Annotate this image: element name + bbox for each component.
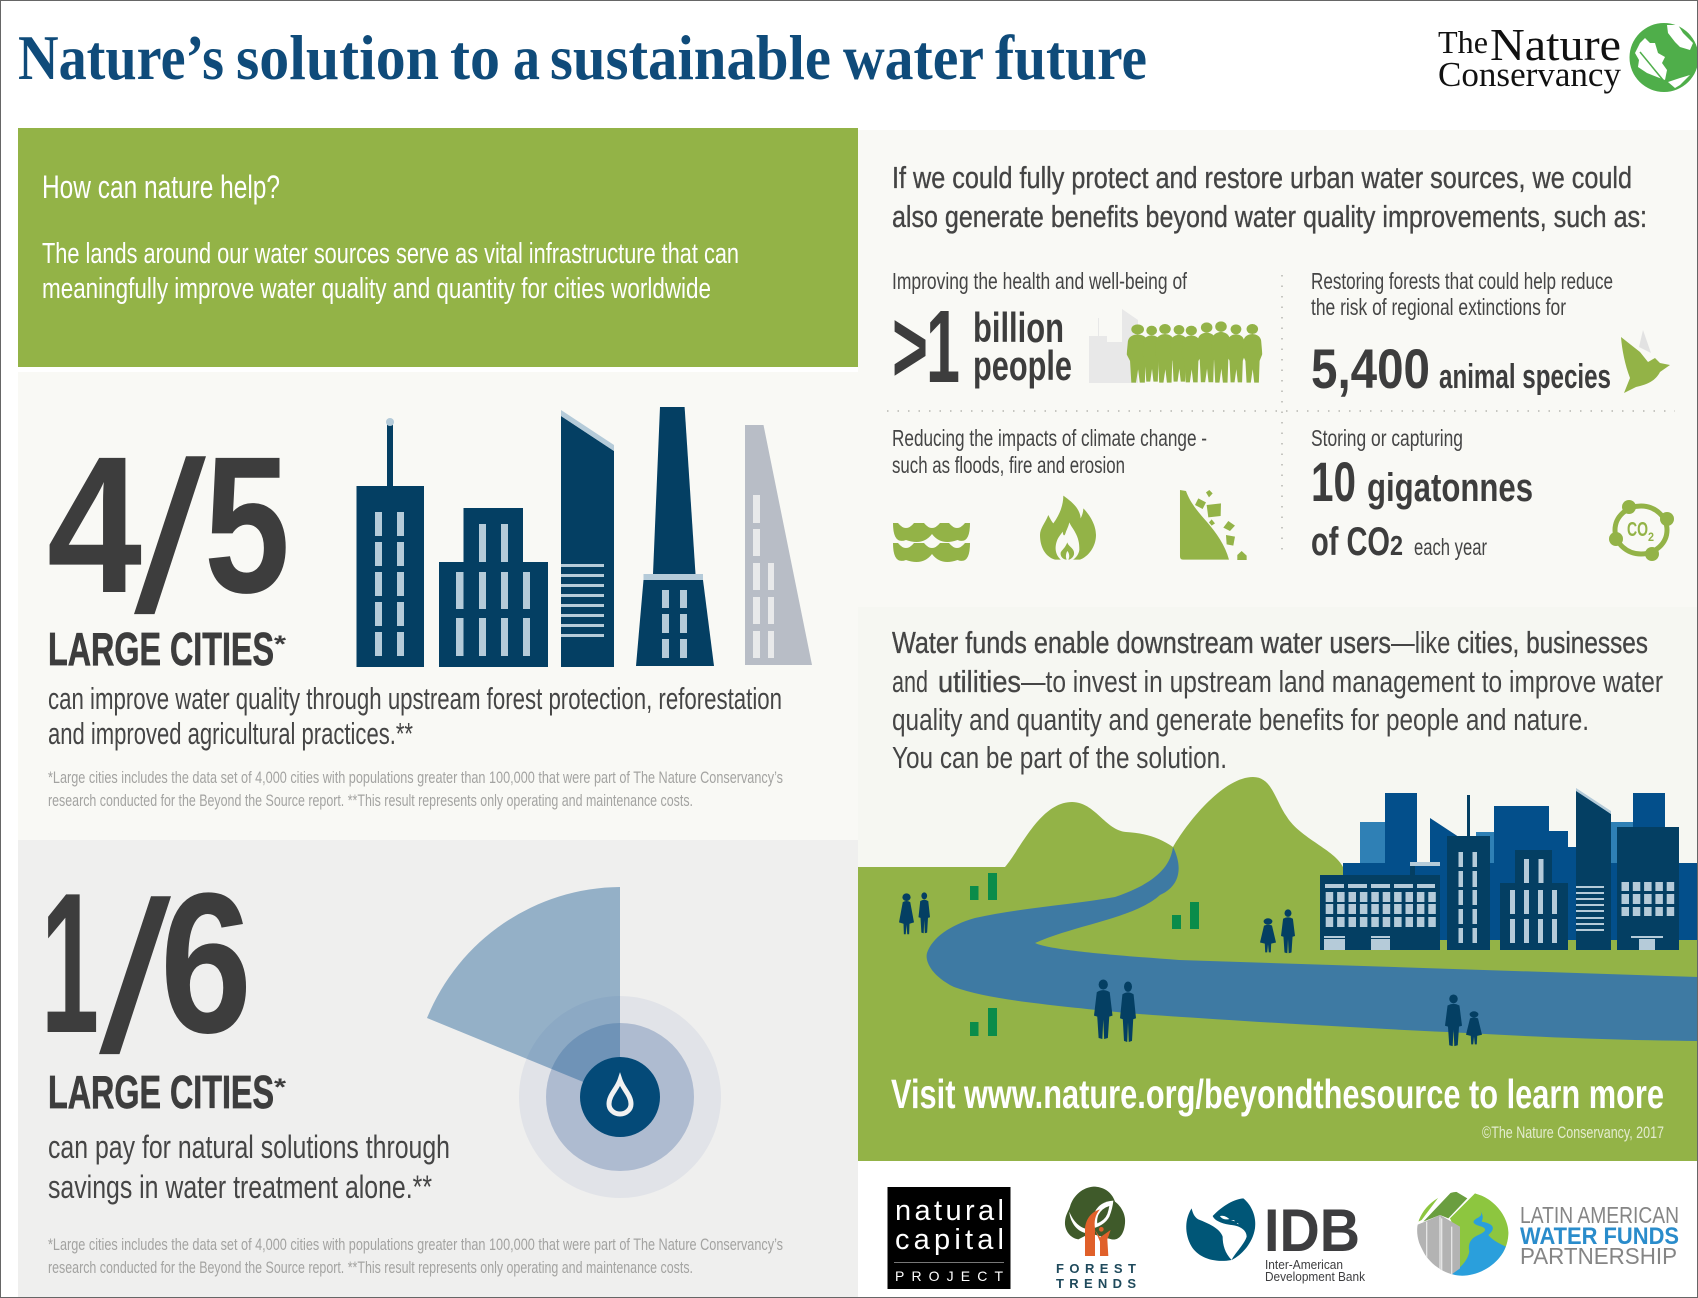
panel: water funds scene [858,607,1698,1161]
city background [1343,793,1698,940]
logo: natural capital project: natural [895,1195,1004,1227]
intro text: The lands around our water sources serve as vital infrastructure that can [42,238,739,270]
benefit: carbon storage [1311,425,1674,564]
statistic: more than 1 billion people: billion [973,304,1064,351]
chart: one-sixth sector and water drop circles [427,887,721,1198]
logo: forest trends [1056,1187,1136,1291]
logo: The Nature Conservancy [1438,19,1698,94]
statistic: 10 gigatonnes of CO2 each year: each year [1414,534,1487,560]
people silhouettes [899,892,1482,1046]
logo: IDB: IDB [1264,1197,1360,1264]
logo: latin american water funds partnership [1415,1188,1679,1280]
icon: CO2 cycle: 2 [1648,530,1654,544]
description text: and improved agricultural practices.** [48,716,413,751]
logo: natural capital project [888,1187,1010,1289]
statistic: 4/5 [47,416,290,658]
logo: IDB: Inter-American [1265,1257,1343,1272]
benefit: carbon storage: Storing or capturing [1311,425,1463,451]
statistic: 10 gigatonnes of CO2 each year: 10 [1311,450,1356,513]
footnote [48,1235,783,1277]
statistic: 4/5: 5 [204,416,290,634]
water funds text: Water funds enable downstream water users [892,625,1391,660]
description text: can improve water quality through upstream forest protection, reforestation [48,681,782,716]
panel: one of six large cities [18,840,858,1297]
logo: natural capital project: capital [895,1224,1004,1256]
benefit: restoring forests [1311,268,1670,400]
illustration: landscape [858,777,1698,1161]
title: a [513,22,540,93]
building E [1617,793,1679,950]
icon: landslide [1180,490,1247,560]
footnote [48,768,783,810]
description text [48,1129,450,1205]
statistic: 10 gigatonnes of CO2 each year: of CO [1311,520,1390,564]
building 4 [636,407,714,666]
footnote: *Large cities includes the data set of 4,000 cities with populations greater than 100,000 that were part of The Nature Conservancy’s [48,768,783,787]
subheading: large cities: * [274,631,287,658]
logo: forest trends: FOREST [1056,1261,1136,1276]
benefit: climate change impacts [892,425,1247,562]
statistic: 5,400 animal species [1311,337,1611,400]
statistic: 10 gigatonnes of CO2 each year: 2 [1390,530,1403,561]
subheading: large cities: LARGE CITIES [48,1066,274,1118]
benefits heading [892,160,1647,234]
benefit: climate change impacts: Reducing the impacts of climate change - [892,425,1207,451]
statistic: 10 gigatonnes of CO2 each year: gigatonnes [1367,466,1533,510]
statistic: 5,400 animal species: animal species [1439,358,1611,396]
logo: The Nature Conservancy: Nature [1490,19,1621,70]
benefit: climate change impacts: such as floods, fire and erosion [892,452,1125,478]
statistic: more than 1 billion people: > [892,289,928,404]
building 1 [356,418,424,667]
logo: latin american water funds partnership: PARTNERSHIP [1520,1243,1677,1269]
logo: IDB: Development Bank [1265,1269,1365,1284]
title: future [995,22,1147,93]
icon: CO2 cycle: CO [1627,519,1648,541]
statistic: 5,400 animal species: 5,400 [1311,337,1430,400]
logo: IDB [1186,1197,1365,1284]
statistic: 1/6: 6 [160,852,252,1075]
intro text: meaningfully improve water quality and quantity for cities worldwide [42,273,711,305]
subheading: large cities: * [274,1074,287,1101]
description text [48,681,782,751]
heading: how can nature help: How can nature help? [42,169,280,205]
title: to [450,22,500,93]
subheading: large cities: LARGE CITIES [48,623,274,675]
statistic: 1/6: 1 [41,852,99,1075]
benefit: restoring forests: the risk of regional extinctions for [1311,294,1566,320]
statistic: more than 1 billion people: people [973,342,1072,389]
icon: CO2 cycle [1609,500,1674,561]
statistic: 1/6 [41,852,252,1098]
footnote: *Large cities includes the data set of 4,000 cities with populations greater than 100,000 that were part of The Nature Conservancy’s [48,1235,783,1254]
illustration: city skyline [356,407,812,667]
icon: crowd of people [1127,321,1262,383]
panel: benefits [858,130,1698,607]
statistic: more than 1 billion people: 1 [926,289,960,404]
building A [1320,862,1440,950]
building 2 [439,508,548,667]
building B [1447,795,1490,950]
statistic: 1/6: / [99,857,171,1098]
green trees [970,873,1199,1036]
icon: bird [1621,330,1670,393]
panel: how can nature help [18,128,858,367]
statistic: 10 gigatonnes of CO2 each year [1311,450,1533,564]
benefit: health and well-being [892,268,1262,404]
intro text [42,238,739,305]
building D [1576,788,1611,950]
statistic: 4/5: 4 [47,416,142,634]
title: water [843,22,984,93]
title: Nature’s [18,22,224,93]
description text: savings in water treatment alone.** [48,1169,432,1205]
description text: can pay for natural solutions through [48,1129,450,1165]
water funds text: utilities [938,664,1021,699]
icon: fire [1040,496,1096,560]
title: solution [236,22,439,93]
building C [1500,850,1568,950]
footnote: research conducted for the Beyond the Source report. **This result represents only operating and maintenance costs. [48,1258,693,1277]
title [18,22,1147,93]
river [927,847,1698,1041]
logo: latin american water funds partnership: WATER FUNDS [1520,1223,1679,1250]
title: sustainable [550,22,831,93]
logo: The Nature Conservancy: Conservancy [1438,55,1621,94]
logo: The Nature Conservancy: The [1438,24,1488,60]
footnote: research conducted for the Beyond the Source report. **This result represents only operating and maintenance costs. [48,791,693,810]
building 3 [561,410,614,667]
panel: four of five large cities [18,372,858,840]
ground and mountains [858,777,1698,1161]
icon: water drop [609,1080,631,1114]
water funds text: and [892,664,934,699]
benefit: health and well-being: Improving the health and well-being of [892,268,1187,294]
water funds text: You can be part of the solution. [892,740,1227,775]
building 5 [745,425,812,665]
water funds text: cities, businesses [1457,625,1648,660]
statistic: more than 1 billion people [892,289,1072,404]
statistic: 4/5: / [134,417,206,658]
logo: natural capital project: PROJECT [895,1268,1003,1284]
water funds text [892,625,1663,775]
icon: gray buildings [1089,309,1138,383]
icon: flood waves [893,523,970,562]
water funds text: —like [1391,625,1457,660]
logo: forest trends: TRENDS [1056,1276,1136,1291]
